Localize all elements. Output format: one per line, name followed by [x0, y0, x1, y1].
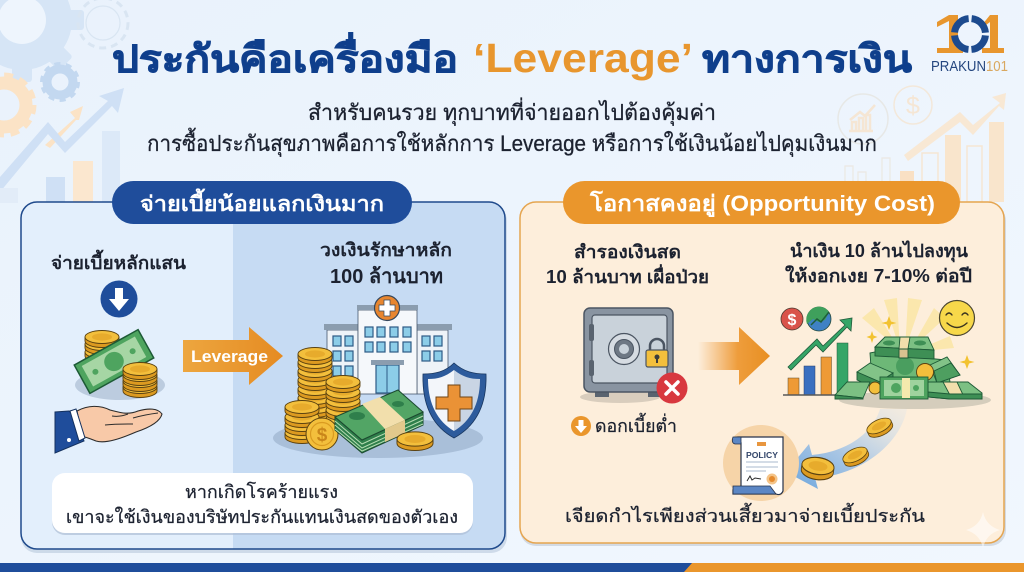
title: ประกันคือเครื่องมือ	[112, 32, 458, 81]
label: pay premium: จ่ายเบี้ยหลักแสน	[51, 249, 187, 273]
heading pill: left panel: จ่ายเบี้ยน้อยแลกเงินมาก	[140, 188, 384, 216]
icon: safe	[580, 308, 688, 404]
icon: cash and coins	[74, 330, 165, 400]
label: invest 10 million: นำเงิน 10 ล้านไปลงทุน	[790, 240, 969, 263]
label: invest 10 million	[785, 240, 972, 286]
decoration: finance icons and growth chart right	[838, 86, 1006, 203]
title: ‘Leverage’	[473, 35, 693, 81]
hospital	[324, 296, 452, 394]
label: coverage 100 million: วงเงินรักษาหลัก	[320, 240, 452, 260]
label: coverage 100 million: 100 ล้านบาท	[330, 265, 443, 288]
icon: open hand	[55, 406, 162, 453]
icon: growth badge	[806, 307, 831, 331]
icon: policy document: POLICY	[746, 451, 779, 460]
icon: sparkle	[966, 512, 1000, 548]
cash bundle	[335, 390, 423, 453]
label: emergency cash	[546, 242, 709, 287]
footer band	[0, 563, 1024, 572]
arrow: Leverage	[183, 327, 283, 385]
decoration: gears and growth chart left	[0, 0, 128, 203]
panel: pay little for a lot	[21, 181, 507, 553]
panel background	[520, 202, 1006, 546]
subtitle: สำหรับคนรวย ทุกบาทที่จ่ายออกไปต้องคุ้มค่า	[308, 97, 716, 126]
callout: white note: หากเกิดโรคร้ายแรง	[185, 481, 338, 502]
decoration: finance icons and growth chart right: $	[906, 92, 920, 120]
icon: dollar badge	[781, 308, 803, 330]
heading pill: right panel	[563, 181, 960, 224]
logo: PRAKUN101: PRAKUN101	[931, 59, 1008, 75]
logo: PRAKUN101	[931, 15, 1008, 75]
icon: policy document	[723, 425, 799, 501]
label: coverage 100 million	[320, 240, 452, 288]
icon: down arrow	[100, 280, 138, 318]
panel background	[21, 202, 507, 553]
label: low interest	[571, 413, 677, 436]
label: emergency cash: 10 ล้านบาท เผื่อป่วย	[546, 264, 709, 287]
title: ทางการเงิน	[702, 39, 912, 81]
label: invest 10 million: ให้งอกเงย 7-10% ต่อปี	[785, 265, 972, 286]
label: low interest: ดอกเบี้ยต่ำ	[595, 413, 677, 436]
icon: dollar badge: $	[788, 312, 797, 329]
subtitle: การซื้อประกันสุขภาพคือการใช้หลักการ Leverage หรือการใช้เงินน้อยไปคุมเงินมาก	[147, 128, 877, 157]
callout: white note	[52, 473, 473, 535]
label: fund premium from profit: เจียดกำไรเพียงส่วนเสี้ยวมาจ่ายเบี้ยประกัน	[565, 503, 925, 526]
heading pill: right panel: โอกาสคงอยู่ (Opportunity Cost)	[589, 190, 935, 218]
coin stacks: $	[317, 425, 328, 446]
heading pill: left panel	[112, 181, 412, 224]
illustration: hospital, coins, cash and shield	[273, 296, 486, 458]
title	[112, 32, 912, 81]
arrow: coins to policy	[786, 409, 907, 489]
callout: white note: เขาจะใช้เงินของบริษัทประกันแทนเงินสดของตัวเอง	[66, 506, 458, 527]
coin stacks	[285, 348, 360, 450]
bar chart	[783, 318, 860, 395]
money pile	[835, 316, 982, 399]
label: emergency cash: สำรองเงินสด	[574, 242, 681, 262]
arrow: safe to investment	[698, 327, 770, 385]
panel: opportunity cost	[520, 181, 1006, 548]
icon: smiley	[940, 300, 974, 336]
shield	[423, 363, 486, 438]
rays	[862, 298, 954, 352]
arrow: Leverage: Leverage	[191, 347, 268, 366]
illustration: growth chart and money pile	[781, 298, 991, 409]
subtitle	[147, 97, 877, 157]
